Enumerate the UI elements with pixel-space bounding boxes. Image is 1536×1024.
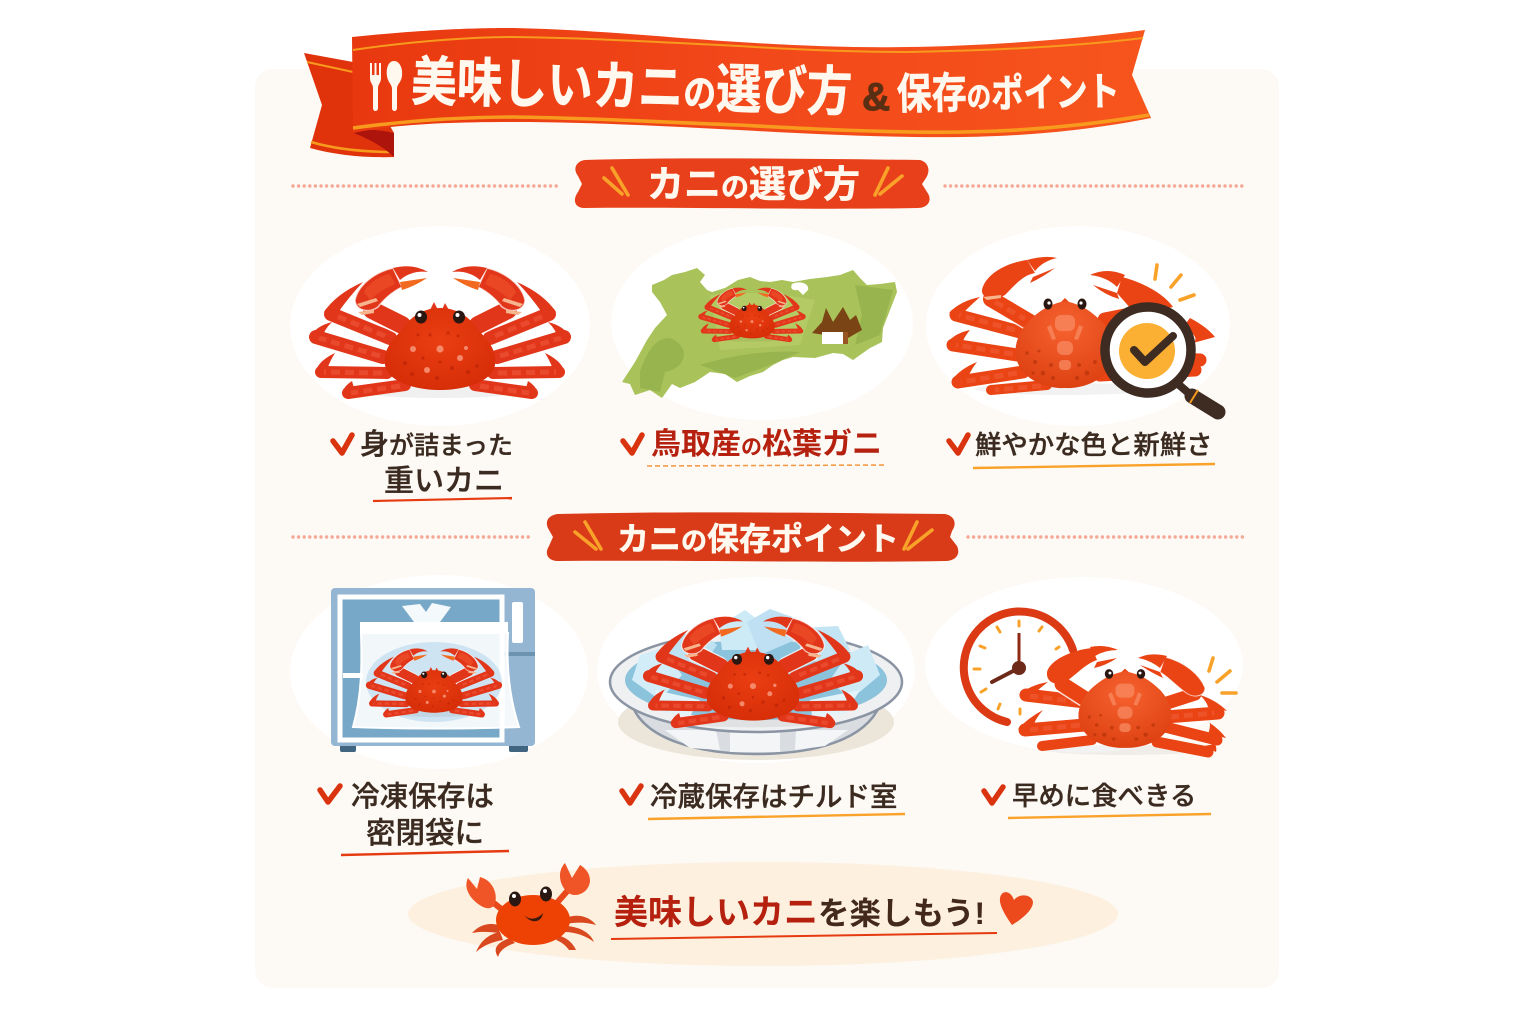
underline: [1008, 814, 1211, 818]
panel: chilled: [597, 577, 915, 819]
icon: clock: [964, 611, 1073, 722]
illustration: map: [622, 268, 897, 398]
background panel: [255, 69, 1279, 988]
section heading: カニの保存ポイント: [547, 512, 958, 562]
section heading: カニの選び方: [575, 158, 930, 209]
title text: storage: 保存のポイント: [896, 68, 1120, 119]
section heading: カニの保存ポイント: カニの保存ポイント: [617, 521, 899, 557]
backdrop: [925, 577, 1243, 753]
underline: [647, 465, 887, 466]
section divider right: selection: [945, 184, 1245, 188]
underline: [611, 933, 997, 939]
section divider left: selection: [293, 184, 558, 188]
illustration: ice cubes: [632, 609, 880, 716]
underline: [373, 498, 512, 501]
label second line: 密閉袋に: [366, 817, 484, 850]
label: 身が詰まった: [360, 428, 513, 461]
illustration: plate: [610, 632, 902, 754]
illustration: crab: [310, 266, 570, 398]
section divider right: storage: [968, 535, 1245, 539]
section divider left: storage: [293, 535, 533, 539]
illustration: freezer: [331, 588, 535, 752]
closing message: 美味しいカニを楽しもう!: [614, 894, 985, 932]
icon: fork and spoon: [370, 61, 402, 111]
label: 冷凍保存は: [351, 781, 494, 813]
sparkle: [1155, 265, 1194, 300]
icon: village: [812, 307, 862, 344]
ribbon left tail: [304, 53, 394, 157]
label: 鮮やかな色と新鮮さ: [975, 430, 1213, 460]
check mark: [333, 435, 352, 453]
underline: [648, 814, 905, 819]
illustration: freezer bag: [353, 603, 519, 728]
backdrop: [408, 862, 1118, 966]
title text: 美味しいカニの選び方: [411, 51, 853, 123]
underline: [341, 851, 509, 855]
illustration: crab: [947, 257, 1215, 395]
label: 鳥取産の松葉ガニ: [651, 428, 882, 461]
check mark: [984, 787, 1003, 803]
label second line: 重いカニ: [384, 465, 504, 498]
panel: eat early: [925, 577, 1243, 818]
panel: vivid colour: [926, 226, 1230, 468]
panel: Tottori matsuba crab: [611, 226, 913, 466]
backdrop: [290, 575, 588, 769]
sparkle: [1209, 658, 1236, 693]
title ribbon: [304, 28, 1151, 157]
check mark: [622, 786, 641, 803]
backdrop: [611, 226, 913, 420]
backdrop: [926, 226, 1230, 426]
underline: [973, 464, 1215, 468]
illustration: crab: [1018, 646, 1227, 755]
backdrop: [290, 226, 590, 426]
check mark: [949, 435, 968, 453]
illustration: small crab: [699, 288, 805, 342]
closing banner: [408, 862, 1118, 966]
label: 早めに食べきる: [1012, 781, 1196, 811]
icon: heart: [1000, 892, 1033, 925]
label: 冷蔵保存はチルド室: [650, 781, 898, 812]
panel: freezer: [290, 575, 588, 855]
ribbon main band: [352, 28, 1151, 137]
icon: smiling crab: [466, 863, 596, 957]
check mark: [320, 786, 340, 802]
illustration: crab on ice: [644, 617, 862, 727]
ampersand: &: [862, 76, 890, 119]
section heading: カニの選び方: カニの選び方: [647, 164, 860, 205]
illustration: plate shadow: [618, 684, 894, 760]
panel: heavy crab: [290, 226, 590, 501]
check mark: [623, 435, 642, 453]
illustration: crab in bag: [366, 648, 502, 717]
icon: magnifier: [1105, 307, 1218, 412]
backdrop: [597, 577, 915, 763]
